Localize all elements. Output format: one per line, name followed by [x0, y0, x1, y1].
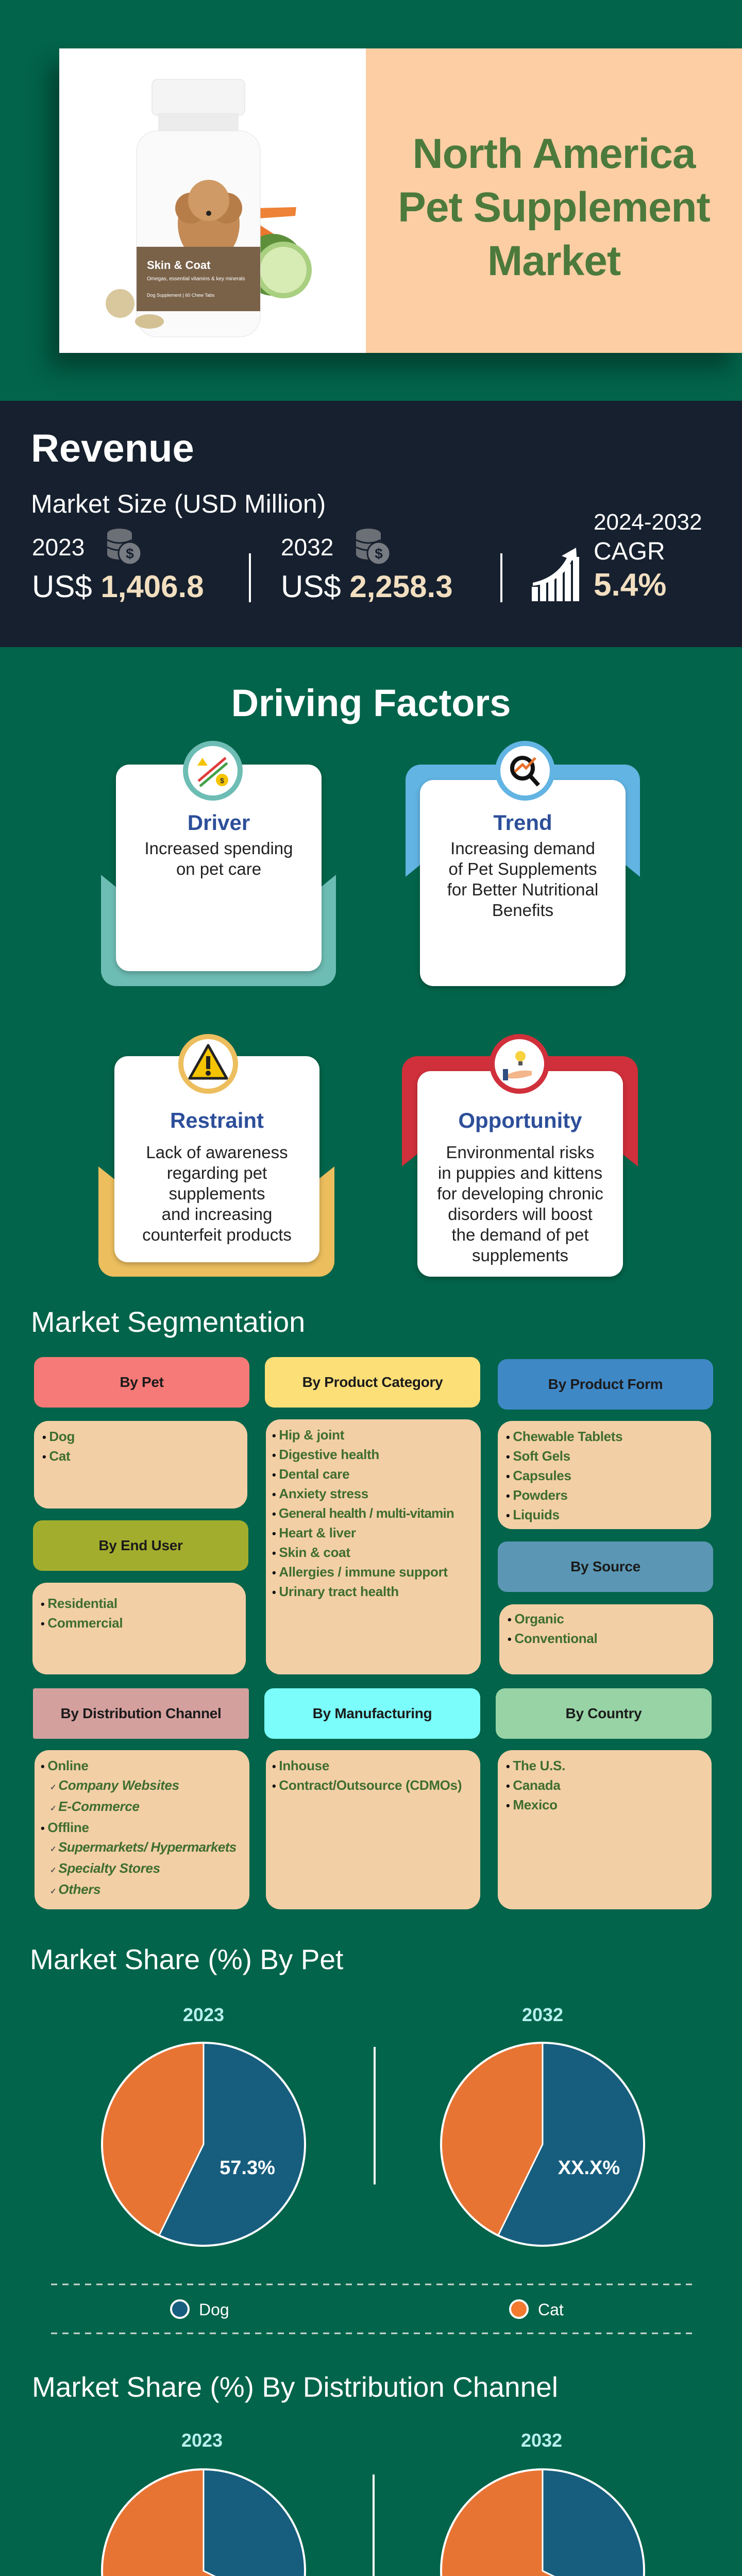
list: end user: •Commercial [41, 1615, 123, 1631]
segmentation: by manufacturing [264, 1688, 480, 1739]
list: source: •Conventional [508, 1631, 597, 1646]
panel: trend: for Better Nutritional [447, 880, 598, 899]
panel: driver: on pet care [176, 859, 261, 878]
panel: trend [406, 741, 640, 989]
segmentation: by product form: By Product Form [548, 1376, 663, 1392]
icon: driver: $ [220, 776, 224, 785]
icon: warning [178, 1034, 238, 1094]
list: product form [498, 1421, 711, 1529]
list: distribution channel: ✓E-Commerce [50, 1799, 140, 1814]
list: product form: •Chewable Tablets [506, 1429, 622, 1444]
icon: supplement bottle: Skin & Coat [147, 259, 211, 272]
list: product category: •Heart & liver [272, 1525, 356, 1540]
panel: restraint: and increasing [162, 1205, 272, 1224]
list: manufacturing [266, 1750, 480, 1909]
list: product category: •Allergies / immune support [272, 1564, 448, 1580]
legend: cat [510, 2300, 564, 2319]
year label 2023: 2023 [183, 2004, 224, 2025]
panel: restraint: Lack of awareness [146, 1143, 288, 1162]
segmentation: by product form [498, 1359, 713, 1410]
list: distribution channel [35, 1750, 249, 1909]
legend: dog: Dog [199, 2300, 229, 2319]
year label 2032: 2032 [522, 2004, 563, 2025]
panel: trend: of Pet Supplements [448, 859, 597, 878]
panel: trend: Trend [493, 810, 552, 835]
list: pet [34, 1421, 247, 1509]
list: country [498, 1750, 712, 1909]
pie 2023: 57.3% [220, 2157, 275, 2179]
icon: coins: $ [126, 546, 134, 562]
panel: opportunity: disorders will boost [448, 1205, 593, 1224]
panel: restraint [98, 1034, 334, 1277]
segmentation: by country [496, 1688, 712, 1739]
list: product category [266, 1419, 481, 1674]
segmentation: by pet: By Pet [120, 1374, 164, 1390]
list: country: •The U.S. [506, 1758, 565, 1773]
heading: market share by distribution channel: Market Share (%) By Distribution Channel [32, 2371, 558, 2403]
icon: supplement bottle: Omegas, essential vitamins & key minerals [147, 276, 245, 282]
panel: driver [101, 741, 336, 986]
icon: coins: $ [375, 546, 383, 562]
list: product category: •Urinary tract health [272, 1584, 399, 1599]
heading: driving factors: Driving Factors [231, 682, 511, 724]
divider [500, 553, 502, 602]
divider [373, 2475, 375, 2576]
divider [374, 2047, 376, 2184]
list: product category: •Anxiety stress [272, 1486, 368, 1501]
list: product category: •Digestive health [272, 1447, 379, 1462]
value 2032 [281, 529, 453, 604]
revenue band [0, 401, 742, 647]
legend: dog [171, 2300, 229, 2319]
icon: growth chart [532, 548, 579, 601]
list: distribution channel: •Offline [41, 1820, 89, 1835]
panel: trend: Increasing demand [450, 839, 595, 858]
panel: restraint: Restraint [170, 1108, 264, 1132]
title [398, 130, 710, 284]
icon: opportunity [491, 1034, 548, 1094]
icon: coins [356, 529, 390, 564]
panel: opportunity: for developing chronic [437, 1184, 603, 1203]
panel: trend: Benefits [492, 901, 553, 920]
panel: driver: Increased spending [144, 839, 293, 858]
heading: market segmentation: Market Segmentation [31, 1306, 305, 1338]
value 2023: 2023 [32, 534, 85, 561]
panel: restraint: supplements [168, 1184, 265, 1203]
CAGR: 5.4% [594, 567, 666, 603]
list: product form: •Powders [506, 1487, 568, 1503]
title: Pet Supplement [398, 184, 710, 231]
CAGR: 2024-2032 [594, 510, 702, 535]
CAGR: CAGR [594, 538, 665, 565]
pie 2032 [441, 2043, 644, 2246]
product image panel [59, 48, 366, 353]
list: manufacturing: •Contract/Outsource (CDMOs) [272, 1777, 462, 1793]
list: distribution channel: •Online [41, 1758, 89, 1773]
icon: supplement bottle: Dog Supplement | 60 Chew Tabs [147, 293, 215, 298]
market size label: Market Size (USD Million) [31, 489, 326, 518]
list: source: •Organic [508, 1611, 564, 1626]
icon: trend [496, 741, 554, 801]
segmentation: by distribution channel [33, 1688, 249, 1739]
list: country: •Mexico [506, 1797, 558, 1812]
list: product form: •Capsules [506, 1468, 571, 1483]
list: country: •Canada [506, 1777, 561, 1793]
panel: opportunity: the demand of pet [451, 1225, 589, 1244]
segmentation: by product category: By Product Category [302, 1374, 443, 1390]
list: distribution channel: ✓Others [50, 1882, 100, 1897]
value 2032: US$ 2,258.3 [281, 569, 453, 604]
list: distribution channel: ✓Company Websites [50, 1777, 179, 1793]
list: product category: •Hip & joint [272, 1427, 344, 1443]
list: pet: •Cat [42, 1448, 70, 1464]
segmentation: by end user [33, 1520, 248, 1571]
year label 2023: 2023 [181, 2430, 223, 2451]
panel: opportunity: Opportunity [458, 1108, 582, 1132]
icon: driver [183, 741, 243, 801]
revenue heading: Revenue [31, 427, 194, 470]
pie charts: by pet [51, 2004, 692, 2334]
value 2032: 2032 [281, 534, 333, 561]
list: product form: •Liquids [506, 1507, 560, 1522]
segmentation: by country: By Country [566, 1705, 642, 1721]
segmentation: by end user: By End User [98, 1537, 183, 1553]
panel: opportunity: in puppies and kittens [438, 1163, 602, 1182]
header card [59, 48, 742, 353]
segmentation: by source: By Source [570, 1558, 640, 1574]
heading: market share by pet: Market Share (%) By Pet [30, 1943, 343, 1975]
list: product category: •General health / multi-vitamin [272, 1505, 454, 1521]
list: manufacturing: •Inhouse [272, 1758, 329, 1773]
panel: restraint: counterfeit products [142, 1225, 292, 1244]
segmentation: by source [498, 1541, 713, 1592]
pie 2032 [441, 2469, 644, 2576]
CAGR [594, 510, 702, 603]
title panel [366, 48, 742, 353]
list: distribution channel: ✓Specialty Stores [50, 1860, 160, 1876]
pie 2023 [102, 2043, 305, 2246]
pie 2032: XX.X% [558, 2157, 620, 2179]
divider [249, 553, 251, 602]
legend: cat: Cat [538, 2300, 564, 2319]
value 2023 [32, 529, 204, 604]
list: product category: •Skin & coat [272, 1545, 350, 1560]
panel: restraint: regarding pet [167, 1163, 267, 1182]
title: Market [487, 238, 620, 284]
segmentation: by distribution channel: By Distribution Channel [61, 1705, 222, 1721]
list: end user: •Residential [41, 1596, 117, 1611]
list: distribution channel: ✓Supermarkets/ Hypermarkets [50, 1839, 237, 1855]
list: end user [32, 1583, 246, 1674]
panel: opportunity [402, 1034, 638, 1280]
segmentation: by manufacturing: By Manufacturing [313, 1705, 432, 1721]
segmentation: by product category [265, 1357, 480, 1408]
pie 2023 [102, 2469, 305, 2576]
pie charts: by distribution channel [101, 2430, 645, 2576]
list: product category: •Dental care [272, 1466, 349, 1482]
list: product form: •Soft Gels [506, 1448, 570, 1464]
value 2023: US$ 1,406.8 [32, 569, 204, 604]
panel: opportunity: supplements [472, 1246, 568, 1265]
year label 2032: 2032 [521, 2430, 562, 2451]
list: pet: •Dog [42, 1429, 75, 1444]
segmentation: by pet [34, 1357, 249, 1408]
panel: opportunity: Environmental risks [446, 1143, 594, 1162]
title: North America [412, 130, 696, 177]
icon: coins [107, 529, 140, 564]
list: source [499, 1604, 713, 1674]
icon: supplement bottle [106, 79, 312, 337]
panel: driver: Driver [188, 810, 250, 835]
